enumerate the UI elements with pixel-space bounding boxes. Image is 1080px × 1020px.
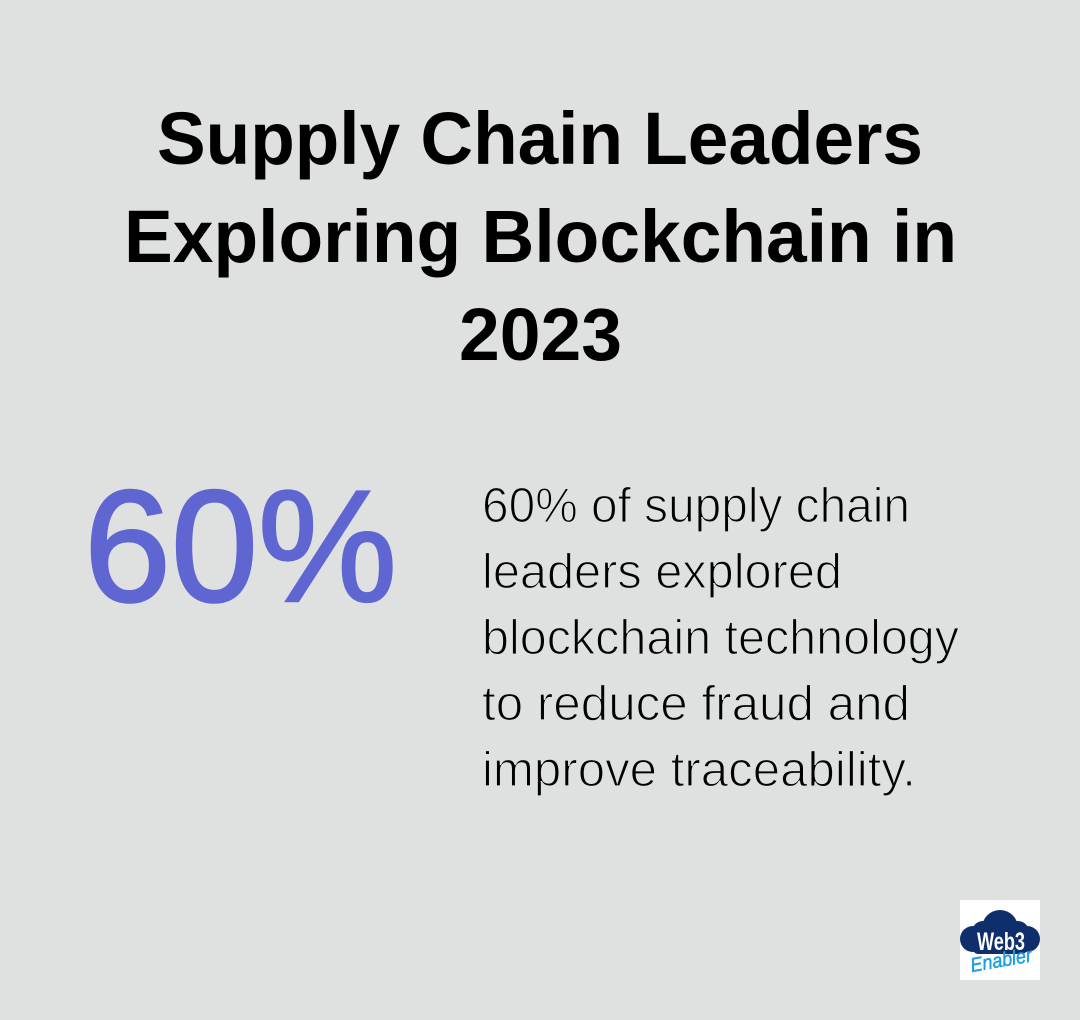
title: 2023 bbox=[459, 293, 622, 376]
logo wordmark: Web3: Web3 bbox=[977, 928, 1025, 956]
icon: cloud bbox=[960, 910, 1040, 954]
description text: 60% of supply chain bbox=[482, 478, 910, 533]
description text bbox=[482, 478, 959, 797]
logo wordmark: Enabler: Enabler bbox=[969, 944, 1035, 977]
title: Supply Chain Leaders bbox=[157, 97, 923, 180]
logo: Web3 Enabler bbox=[960, 900, 1040, 980]
description text: blockchain technology bbox=[482, 610, 959, 665]
description text: improve traceability. bbox=[482, 742, 916, 797]
title: Exploring Blockchain in bbox=[124, 195, 957, 278]
description text: to reduce fraud and bbox=[482, 676, 910, 731]
big statistic: 60%: 60% bbox=[84, 457, 397, 635]
description text: leaders explored bbox=[482, 544, 842, 599]
title bbox=[124, 97, 957, 376]
